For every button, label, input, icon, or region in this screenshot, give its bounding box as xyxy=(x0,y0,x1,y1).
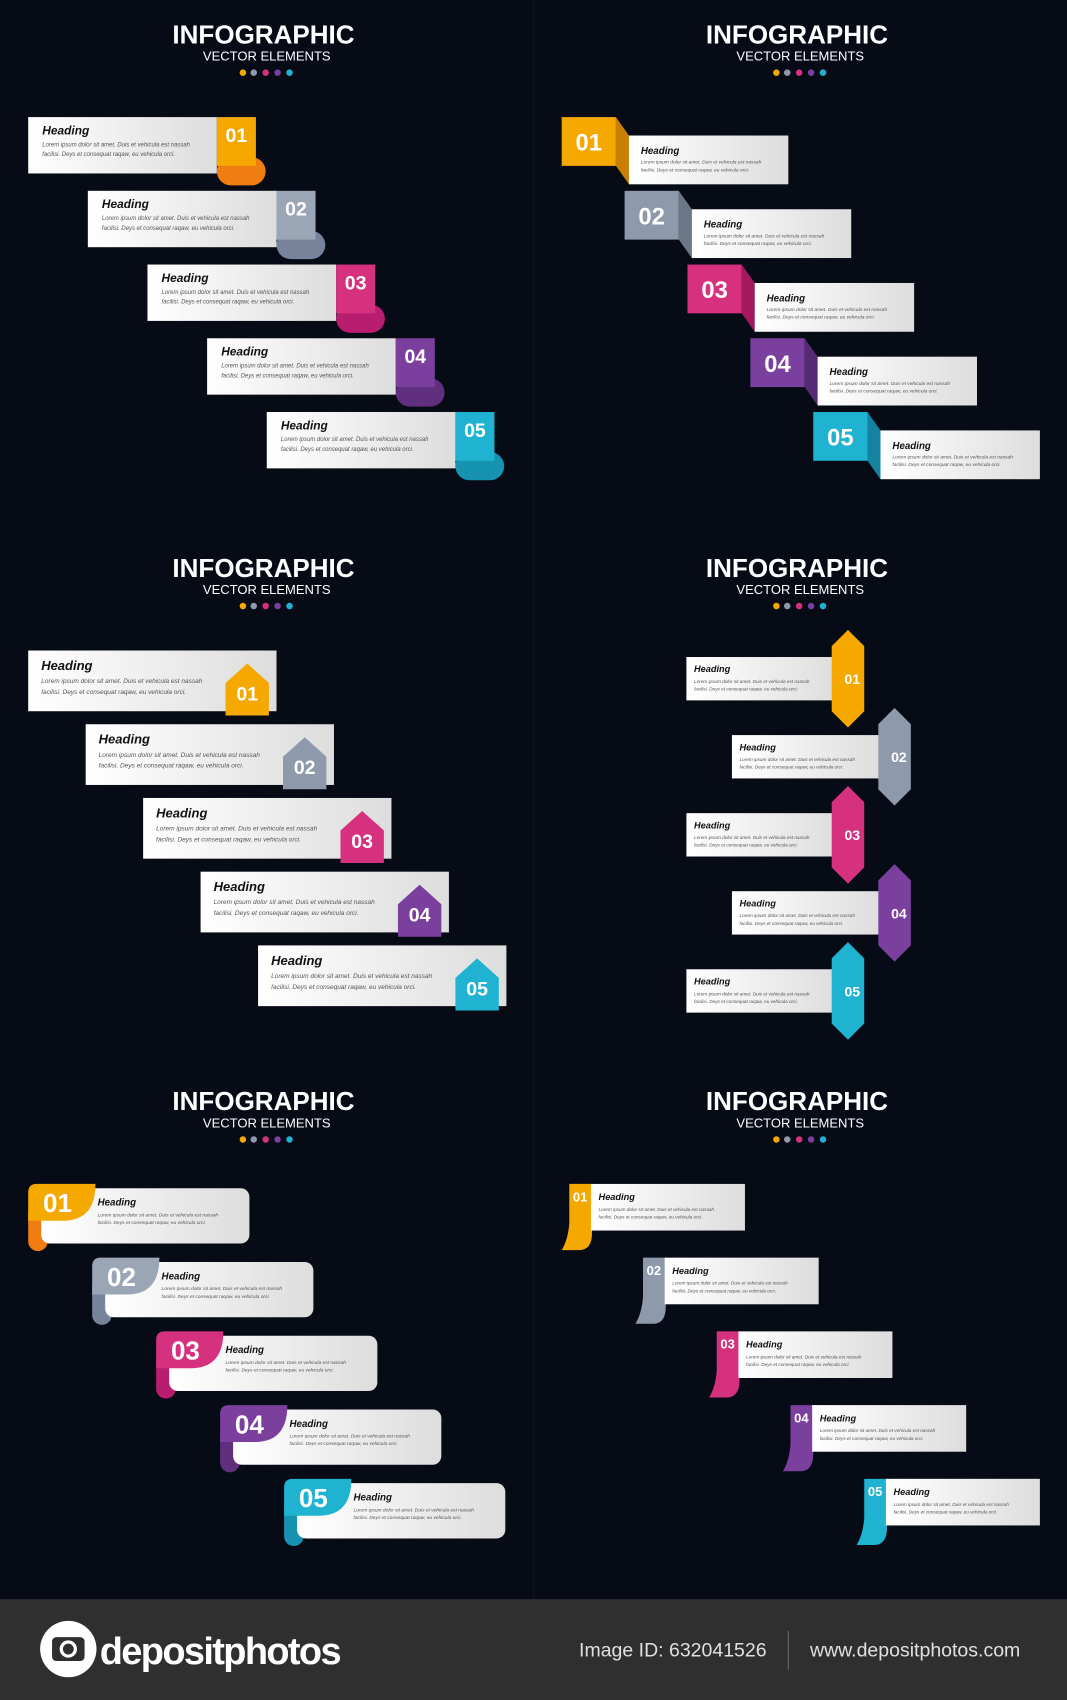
panel: bottom-right scrolls xyxy=(562,1086,1040,1545)
item 01: 01 xyxy=(573,1189,587,1204)
item 03 xyxy=(709,1331,892,1398)
item 02: Lorem ipsum dolor sit amet. Duis et vehicula est nassah xyxy=(162,1286,282,1292)
item 03: Lorem ipsum dolor sit amet. Duis et vehicula est nassah xyxy=(226,1360,346,1366)
item 02: facilisi. Deys et consequat raqaw, eu vehicula orci. xyxy=(162,1294,270,1300)
item 01 xyxy=(686,630,864,727)
item 05: Lorem ipsum dolor sit amet. Duis et vehicula est nassah xyxy=(353,1507,474,1513)
item 04: Lorem ipsum dolor sit amet. Duis et vehicula est nassah xyxy=(830,381,950,387)
title: middle-left: INFOGRAPHIC xyxy=(172,553,355,583)
item 04: Lorem ipsum dolor sit amet. Duis et vehicula est nassah xyxy=(221,364,369,370)
item 01 xyxy=(28,117,266,185)
item 04: 04 xyxy=(891,905,907,921)
item 04: 04 xyxy=(794,1410,809,1425)
item 02 xyxy=(625,191,851,258)
item 02: Heading xyxy=(704,220,742,231)
title: bottom-left: VECTOR ELEMENTS xyxy=(203,1116,331,1131)
item 01: 01 xyxy=(43,1188,72,1218)
item 05 xyxy=(686,942,864,1040)
item 03: Lorem ipsum dolor sit amet. Duis et vehicula est nassah xyxy=(746,1354,862,1359)
image id: Image ID: 632041526 xyxy=(579,1640,767,1662)
item 02: facilisi. Deys et consequat raqaw, eu vehicula orci. xyxy=(102,226,235,232)
item 03: facilisi. Deys et consequat raqaw, eu vehicula orci. xyxy=(767,315,875,321)
item 05: Lorem ipsum dolor sit amet. Duis et vehicula est nassah xyxy=(281,437,429,443)
item 05: facilisi. Deys et consequat raqaw, eu vehicula orci. xyxy=(271,984,416,991)
title: top-left: VECTOR ELEMENTS xyxy=(203,49,331,64)
panel: top-right folded tabs xyxy=(562,19,1040,479)
item 01: Heading xyxy=(41,658,93,673)
item 04 xyxy=(783,1405,966,1471)
item 05 xyxy=(857,1479,1040,1545)
item 04: Heading xyxy=(214,879,265,894)
item 02: 02 xyxy=(891,749,907,765)
item 05: Lorem ipsum dolor sit amet. Duis et vehicula est nassah xyxy=(892,455,1013,461)
item 04: 04 xyxy=(409,905,431,927)
item 02: 02 xyxy=(638,203,665,230)
item 04 xyxy=(207,338,445,407)
item 02 xyxy=(86,724,334,789)
item 05: Heading xyxy=(353,1493,392,1504)
item 03: facilisi. Deys et consequat raqaw, eu vehicula orci. xyxy=(746,1362,850,1367)
item 01: Heading xyxy=(42,123,90,137)
item 05: 05 xyxy=(299,1483,328,1513)
item 04: 04 xyxy=(235,1409,264,1439)
item 05: Heading xyxy=(894,1487,930,1497)
title: middle-right xyxy=(706,553,888,609)
item 03: facilisi. Deys et consequat raqaw, eu vehicula orci. xyxy=(226,1367,334,1373)
item 03: Heading xyxy=(226,1345,264,1356)
item 01: 01 xyxy=(576,130,602,157)
item 02: Heading xyxy=(740,742,776,752)
item 01: facilisi. Deys et consequat raqaw, eu vehicula orci. xyxy=(42,152,175,158)
item 05: facilisi. Deys et consequat raqaw, eu vehicula orci. xyxy=(894,1510,997,1515)
item 03: 03 xyxy=(171,1336,200,1366)
item 03 xyxy=(147,265,385,333)
item 04: Heading xyxy=(820,1413,856,1423)
item 03: Lorem ipsum dolor sit amet. Duis et vehicula est nassah xyxy=(162,290,310,296)
item 05 xyxy=(284,1479,505,1546)
footer bar xyxy=(0,1599,1067,1700)
item 03: facilisi. Deys et consequat raqaw, eu vehicula orci. xyxy=(162,300,294,306)
item 02: facilisi. Deys et consequat raqaw, eu vehicula orci. xyxy=(99,763,244,770)
item 01: Lorem ipsum dolor sit amet. Duis et vehicula est nassah xyxy=(694,679,810,684)
title: middle-right: VECTOR ELEMENTS xyxy=(736,582,864,597)
item 01 xyxy=(28,1184,249,1251)
item 03: Heading xyxy=(156,805,207,820)
item 05 xyxy=(267,412,504,480)
item 03: Heading xyxy=(694,820,731,830)
item 02: 02 xyxy=(107,1262,136,1292)
item 03 xyxy=(686,786,864,884)
item 03: 03 xyxy=(844,827,860,843)
item 01: facilisi. Deys et consequat raqaw, eu vehicula orci. xyxy=(641,167,749,173)
item 05: 05 xyxy=(844,983,860,999)
item 01: Heading xyxy=(98,1198,136,1209)
item 02 xyxy=(635,1258,819,1324)
title: bottom-left xyxy=(172,1086,355,1143)
item 03: Heading xyxy=(767,293,805,304)
item 04 xyxy=(750,338,977,405)
item 01: 01 xyxy=(226,125,247,147)
item 02: Lorem ipsum dolor sit amet. Duis et vehicula est nassah xyxy=(704,233,825,239)
item 04: facilisi. Deys et consequat raqaw, eu vehicula orci. xyxy=(221,373,354,379)
panel: middle-left house badges xyxy=(28,553,506,1010)
item 03: 03 xyxy=(351,831,373,853)
item 02: Heading xyxy=(99,732,150,747)
item 02: Lorem ipsum dolor sit amet. Duis et vehicula est nassah xyxy=(672,1281,788,1286)
item 04: Lorem ipsum dolor sit amet. Duis et vehicula est nassah xyxy=(214,899,375,906)
item 03 xyxy=(687,265,914,332)
item 04 xyxy=(220,1405,441,1472)
panel: bottom-left rounded tabs xyxy=(28,1086,505,1546)
item 02: 02 xyxy=(294,757,316,779)
item 01: facilisi. Deys et consequat raqaw, eu vehicula orci. xyxy=(599,1215,702,1220)
item 02: facilisi. Deys et consequat raqaw, eu vehicula orci. xyxy=(704,241,812,247)
item 01 xyxy=(562,1184,745,1250)
title: middle-right: INFOGRAPHIC xyxy=(706,553,888,583)
title: bottom-right: VECTOR ELEMENTS xyxy=(736,1116,864,1131)
item 03 xyxy=(156,1331,377,1399)
item 02: Heading xyxy=(102,197,150,211)
item 05: 05 xyxy=(464,420,486,442)
website: www.depositphotos.com xyxy=(809,1640,1020,1662)
item 01: Lorem ipsum dolor sit amet. Duis et vehicula est nassah xyxy=(641,160,762,166)
title: top-left: INFOGRAPHIC xyxy=(172,19,355,49)
item 02: Lorem ipsum dolor sit amet. Duis et vehicula est nassah xyxy=(102,216,250,222)
item 04: facilisi. Deys et consequat raqaw, eu vehicula orci. xyxy=(214,910,359,917)
item 03: Lorem ipsum dolor sit amet. Duis et vehicula est nassah xyxy=(767,307,887,313)
item 05 xyxy=(813,412,1040,479)
item 05: 05 xyxy=(868,1484,882,1499)
title: bottom-right: INFOGRAPHIC xyxy=(706,1086,888,1116)
item 01: Lorem ipsum dolor sit amet. Duis et vehicula est nassah xyxy=(41,678,203,685)
item 04: Lorem ipsum dolor sit amet. Duis et vehicula est nassah xyxy=(820,1428,936,1433)
item 04: Lorem ipsum dolor sit amet. Duis et vehicula est nassah xyxy=(290,1434,410,1440)
item 04: facilisi. Deys et consequat raqaw, eu vehicula orci. xyxy=(820,1436,924,1441)
title: top-right xyxy=(706,19,888,76)
item 03: Heading xyxy=(162,271,209,285)
item 02: facilisi. Deys et consequat raqaw, eu vehicula orci. xyxy=(740,765,843,770)
item 05: Heading xyxy=(694,976,731,986)
item 04: 04 xyxy=(764,351,791,378)
item 01: Heading xyxy=(694,664,731,674)
item 02 xyxy=(88,191,325,259)
item 04: facilisi. Deys et consequat raqaw, eu vehicula orci. xyxy=(290,1441,398,1447)
item 03: Lorem ipsum dolor sit amet. Duis et vehicula est nassah xyxy=(694,835,810,840)
item 01: 01 xyxy=(236,683,258,705)
item 01: facilisi. Deys et consequat raqaw, eu vehicula orci. xyxy=(98,1220,206,1226)
item 04: facilisi. Deys et consequat raqaw, eu vehicula orci. xyxy=(830,388,938,394)
item 05: facilisi. Deys et consequat raqaw, eu vehicula orci. xyxy=(892,462,1001,468)
item 01: Lorem ipsum dolor sit amet. Duis et vehicula est nassah xyxy=(98,1212,218,1218)
item 01: Heading xyxy=(641,146,679,157)
item 01: Heading xyxy=(599,1192,635,1202)
item 03: facilisi. Deys et consequat raqaw, eu vehicula orci. xyxy=(156,836,301,843)
item 03: 03 xyxy=(345,272,367,294)
item 03: 03 xyxy=(701,277,728,304)
item 01 xyxy=(562,117,788,184)
item 05: Lorem ipsum dolor sit amet. Duis et vehicula est nassah xyxy=(694,991,810,996)
panel: top-left ribbons xyxy=(28,19,504,480)
title: top-right: INFOGRAPHIC xyxy=(706,19,888,49)
title: middle-left xyxy=(172,553,355,609)
item 01: 01 xyxy=(844,671,860,687)
item 05: facilisi. Deys et consequat raqaw, eu vehicula orci. xyxy=(353,1515,462,1521)
item 04: Heading xyxy=(221,345,269,359)
item 04: Lorem ipsum dolor sit amet. Duis et vehicula est nassah xyxy=(740,913,855,918)
icon: camera logo xyxy=(40,1621,97,1677)
item 04 xyxy=(732,864,911,962)
item 04: facilisi. Deys et consequat raqaw, eu vehicula orci. xyxy=(740,921,843,926)
title: bottom-right xyxy=(706,1086,888,1143)
item 04: Heading xyxy=(740,898,776,908)
item 01: Lorem ipsum dolor sit amet. Duis et vehicula est nassah xyxy=(42,142,191,148)
title: middle-left: VECTOR ELEMENTS xyxy=(203,582,331,597)
item 01 xyxy=(28,651,277,716)
item 02 xyxy=(92,1258,313,1325)
item 03: Lorem ipsum dolor sit amet. Duis et vehicula est nassah xyxy=(156,825,318,832)
logo text: depositphotos xyxy=(100,1631,340,1673)
item 04: Heading xyxy=(290,1419,328,1430)
title: bottom-left: INFOGRAPHIC xyxy=(172,1086,355,1116)
item 01: facilisi. Deys et consequat raqaw, eu vehicula orci. xyxy=(694,687,798,692)
item 04: 04 xyxy=(404,346,426,368)
item 05: 05 xyxy=(827,425,854,452)
item 02: Lorem ipsum dolor sit amet. Duis et vehicula est nassah xyxy=(99,752,260,759)
item 02 xyxy=(732,708,911,806)
item 05: Heading xyxy=(892,441,931,452)
item 03: facilisi. Deys et consequat raqaw, eu vehicula orci. xyxy=(694,843,798,848)
item 04: Heading xyxy=(830,367,868,378)
item 05: Heading xyxy=(271,953,322,968)
title: top-right: VECTOR ELEMENTS xyxy=(736,49,864,64)
item 05 xyxy=(258,945,506,1010)
item 02: facilisi. Deys et consequat raqaw, eu vehicula orci. xyxy=(672,1288,776,1293)
item 02: Lorem ipsum dolor sit amet. Duis et vehicula est nassah xyxy=(740,757,855,762)
item 01: facilisi. Deys et consequat raqaw, eu vehicula orci. xyxy=(41,689,186,696)
title: top-left xyxy=(172,19,355,76)
item 03: Heading xyxy=(746,1340,783,1350)
item 01: Lorem ipsum dolor sit amet. Duis et vehicula est nassah xyxy=(599,1207,714,1212)
item 02: 02 xyxy=(285,199,307,221)
item 05: Heading xyxy=(281,418,329,432)
item 02: Heading xyxy=(162,1271,200,1282)
item 02: Heading xyxy=(672,1266,709,1276)
item 03: 03 xyxy=(720,1337,735,1352)
item 02: 02 xyxy=(647,1263,661,1278)
item 03 xyxy=(143,798,391,863)
item 05: Lorem ipsum dolor sit amet. Duis et vehicula est nassah xyxy=(894,1502,1009,1507)
item 05: 05 xyxy=(466,978,488,1000)
panel: middle-right arrows xyxy=(686,553,911,1040)
item 05: facilisi. Deys et consequat raqaw, eu vehicula orci. xyxy=(694,999,798,1004)
item 05: Lorem ipsum dolor sit amet. Duis et vehicula est nassah xyxy=(271,973,433,980)
item 05: facilisi. Deys et consequat raqaw, eu vehicula orci. xyxy=(281,447,414,453)
item 04 xyxy=(201,872,449,937)
